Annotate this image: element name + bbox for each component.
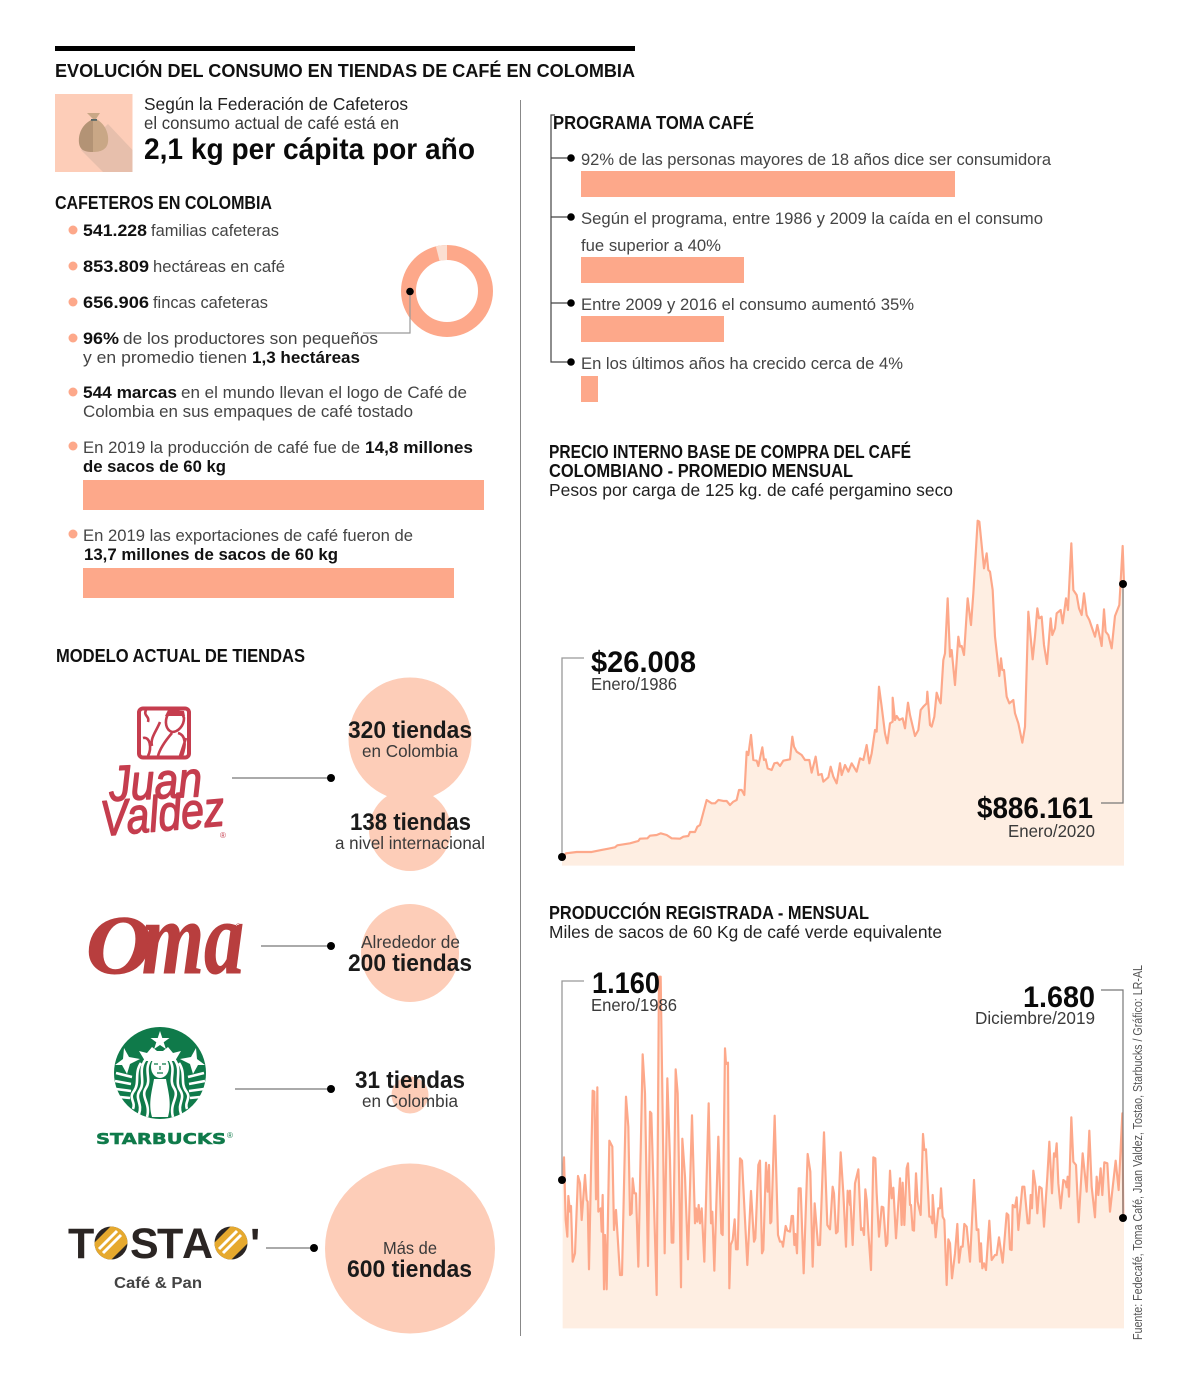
item: exportaciones: En 2019 las exportaciones de café fueron de: [83, 526, 413, 545]
callout: $26.008: [558, 646, 696, 861]
label: 600 tiendas: Más de: [383, 1238, 437, 1258]
panel: modelo actual de tiendas: [56, 646, 495, 1334]
logo: Oma: [86, 881, 244, 996]
logo: Juan Valdez: Juan: [107, 751, 203, 812]
label: 138 tiendas: a nivel internacional: [335, 833, 485, 853]
panel: programa Toma Café: [551, 112, 1052, 402]
callout: 1.160: 1.160: [592, 967, 660, 1000]
circle: Tostao: [325, 1164, 495, 1334]
text: intro: Según la Federación de Cafeteros: [144, 94, 408, 114]
item: marcas: en el mundo llevan el logo de Café de: [181, 383, 467, 402]
leader: Oma: [261, 942, 335, 950]
item: 35%: [567, 295, 914, 342]
item: fincas: fincas cafeteras: [153, 293, 268, 312]
item: fincas: [68, 293, 268, 312]
logo: Juan Valdez: ®: [220, 831, 226, 840]
heading: COLOMBIANO - PROMEDIO MENSUAL: [549, 461, 853, 481]
label: 31 tiendas: [355, 1067, 465, 1111]
logo: Tostao: [68, 1226, 258, 1288]
label: 600 tiendas: [347, 1238, 472, 1283]
panel: cafeteros en Colombia: [55, 193, 486, 598]
label: 320 tiendas: 320 tiendas: [348, 717, 472, 744]
item: fincas: 656.906: [83, 293, 149, 312]
panel: consumo per cápita: [55, 94, 475, 172]
logo: Tostao: TOSTAO': [68, 1220, 260, 1268]
item: producción: [68, 438, 473, 476]
heading: [549, 902, 942, 942]
label: 200 tiendas: Alrededor de: [361, 932, 460, 952]
callout: 1.680: [975, 981, 1127, 1222]
label: 320 tiendas: en Colombia: [362, 741, 458, 761]
callout: 1.680: 1.680: [1023, 981, 1095, 1014]
item: productores: 96%: [83, 329, 119, 348]
leader: Juan Valdez: [232, 774, 335, 782]
circle: Starbucks: [392, 1076, 428, 1114]
circle: Juan Valdez internacional: [369, 789, 451, 871]
item: hectáreas: 853.809: [83, 257, 149, 276]
logo: Tostao: Café & Pan: [114, 1275, 202, 1292]
item: familias: familias cafeteras: [151, 221, 279, 240]
item: familias: [68, 221, 279, 240]
logo: Starbucks: ®: [227, 1131, 233, 1140]
label: 200 tiendas: [348, 932, 472, 977]
item: producción: de sacos de 60 kg: [83, 457, 226, 476]
heading: CAFETEROS EN COLOMBIA: [55, 193, 272, 213]
item: productores: y en promedio tienen: [83, 348, 247, 367]
label: 200 tiendas: 200 tiendas: [348, 950, 472, 977]
item: hectáreas: hectáreas en café: [153, 257, 285, 276]
heading: Miles de sacos de 60 Kg de café verde equivalente: [549, 922, 942, 942]
leader: Starbucks: [235, 1085, 335, 1093]
bar: producción 14,8 millones: [83, 480, 484, 510]
item: familias: 541.228: [83, 221, 147, 240]
item: exportaciones: [68, 526, 413, 564]
logo: Oma: ma: [142, 881, 244, 996]
area chart: precio: [562, 521, 1124, 866]
item: 92%: 92% de las personas mayores de 18 años dice ser consumidora: [581, 150, 1052, 169]
item: 40%: [567, 209, 1043, 283]
item: marcas: Colombia en sus empaques de café tostado: [83, 402, 413, 421]
callout: $26.008: Enero/1986: [591, 674, 677, 694]
label: 31 tiendas: en Colombia: [362, 1091, 458, 1111]
heading: PRECIO INTERNO BASE DE COMPRA DEL CAFÉ: [549, 441, 911, 462]
heading: MODELO ACTUAL DE TIENDAS: [56, 646, 305, 666]
label: 31 tiendas: 31 tiendas: [355, 1067, 465, 1094]
big figure: 2,1 kg per cápita por año: [144, 133, 475, 166]
circle: Oma: [361, 904, 459, 1002]
label: 600 tiendas: 600 tiendas: [347, 1256, 472, 1283]
item: productores: [68, 329, 378, 367]
logo: Juan Valdez: Valdez: [98, 780, 226, 847]
callout: $26.008: $26.008: [591, 646, 696, 679]
logo: Starbucks: STARBUCKS: [96, 1130, 226, 1148]
label: 320 tiendas: [348, 717, 472, 761]
item: hectáreas: [68, 257, 285, 276]
heading: PRODUCCIÓN REGISTRADA - MENSUAL: [549, 902, 869, 923]
item: 92%: [567, 150, 1052, 197]
heading: Pesos por carga de 125 kg. de café pergamino seco: [549, 480, 953, 500]
text: intro: [144, 94, 408, 133]
callout: 1.160: Enero/1986: [591, 995, 677, 1015]
item: 4%: En los últimos años ha crecido cerca de 4%: [581, 354, 903, 373]
logo: Starbucks: [96, 1027, 233, 1148]
item: 40%: Según el programa, entre 1986 y 2009 la caída en el consumo: [581, 209, 1043, 228]
callout: 1.160: [558, 967, 677, 1184]
callout: 1.680: Diciembre/2019: [975, 1008, 1095, 1028]
logo: Juan Valdez: [98, 708, 226, 847]
icon: coffee sack: [55, 94, 132, 172]
item: producción: 14,8 millones: [365, 438, 473, 457]
logo: Oma: O: [86, 899, 152, 992]
item: productores: de los productores son pequeños: [123, 329, 378, 348]
label: 138 tiendas: [335, 809, 485, 853]
callout: $886.161: $886.161: [977, 792, 1093, 825]
item: 4%: [567, 354, 903, 402]
bar: exportaciones 13,7 millones: [83, 568, 454, 598]
leader: Tostao: [266, 1244, 318, 1252]
panel: precio interno: [549, 441, 1127, 866]
donut chart: 96%: [363, 252, 486, 333]
callout: $886.161: Enero/2020: [1008, 821, 1095, 841]
label: 138 tiendas: 138 tiendas: [350, 809, 471, 836]
callout: $886.161: [977, 580, 1127, 841]
item: exportaciones: 13,7 millones de sacos de 60 kg: [84, 545, 338, 564]
source note: Fuente: Fedecafé, Toma Café, Juan Valdez, Tostao, Starbucks / Gráfico: LR-AL: [1130, 965, 1145, 1340]
item: marcas: 544 marcas: [83, 383, 177, 402]
text: intro: el consumo actual de café está en: [144, 113, 399, 133]
heading: [549, 441, 953, 500]
area chart: producción: [563, 977, 1124, 1328]
item: 35%: Entre 2009 y 2016 el consumo aumentó 35%: [581, 295, 914, 314]
logo: Oma: ®: [235, 922, 242, 932]
item: productores: 1,3 hectáreas: [252, 348, 360, 367]
item: marcas: [68, 383, 467, 421]
panel: producción registrada: [549, 902, 1127, 1328]
item: producción: En 2019 la producción de café fue de: [83, 438, 360, 457]
item: 40%: fue superior a 40%: [581, 236, 721, 255]
title: EVOLUCIÓN DEL CONSUMO EN TIENDAS DE CAFÉ EN COLOMBIA: [55, 60, 635, 81]
circle: Juan Valdez Colombia: [348, 678, 472, 800]
heading: PROGRAMA TOMA CAFÉ: [553, 112, 754, 133]
